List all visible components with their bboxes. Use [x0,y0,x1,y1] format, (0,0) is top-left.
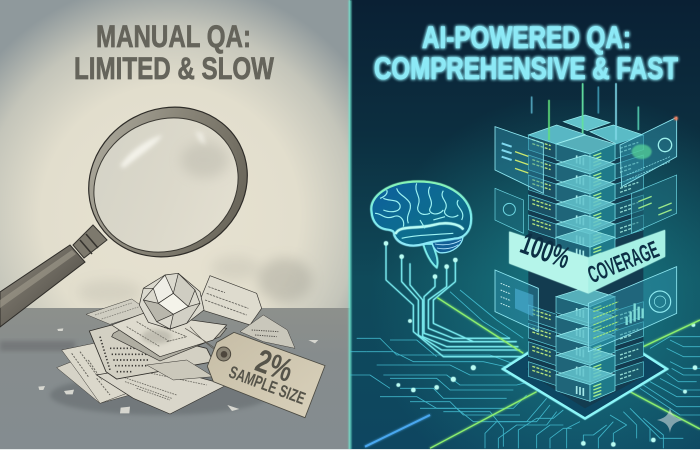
tag label: SAMPLE SIZE [226,362,308,408]
paper: right sheet [240,315,295,348]
paper: bottom front [97,365,227,414]
tag string [185,327,223,354]
brain stem [423,244,437,267]
title: manual QA: MANUAL QA: [96,18,251,54]
title: manual QA [74,18,274,86]
paper: left lower [57,340,140,403]
icon: magnifying glass [0,80,274,327]
tower top blocks [528,115,643,144]
paper: back right [197,276,262,325]
dark background [350,0,700,450]
lens highlight [120,135,162,168]
magnifier rim [62,80,274,284]
wall background [0,0,350,310]
paper pile [38,273,325,418]
magnifier handle [0,225,107,327]
banner text: 100%: 100% [516,226,575,275]
coverage banner [509,230,665,293]
brain folds [375,183,463,238]
cerebellum [431,235,463,253]
table surface [0,308,350,450]
icon: sparkle watermark [657,407,683,433]
bottom edge [0,449,700,450]
tower right column [615,135,643,386]
blue streak [365,415,430,447]
data panel: lower left [495,270,538,332]
circuit traces [350,241,700,448]
cerebrum outline [371,182,471,245]
paper: punched form [89,325,213,380]
tower body [528,135,643,408]
tower front column [556,135,615,401]
table shadow streak [0,341,75,351]
server tower [495,83,678,418]
title: manual QA: LIMITED & SLOW [74,50,274,86]
stain on wall [78,256,312,304]
tag value: 2% [251,341,298,389]
lower traces [350,290,700,448]
glowing base platform [503,317,667,418]
background glow [350,100,700,450]
tag eyelet [217,347,231,361]
paper scraps [38,328,318,413]
data panel: lower right [588,267,677,352]
data panel: mid right [632,175,677,233]
paper: top sheet [112,313,227,361]
magnifier lens [70,93,262,277]
trace nodes [384,241,697,446]
title: AI-powered QA [374,19,678,86]
glowing green lines [430,298,700,448]
table shadow under papers [50,375,270,415]
data panel: upper left [495,127,543,193]
lens smudge [181,142,229,178]
price tag [207,332,325,418]
vertical light beams [532,83,638,140]
panel: manual QA [0,0,350,450]
crumpled paper ball [139,273,204,329]
tower left column [528,135,557,386]
paper: back left [86,299,150,324]
title: AI-powered QA: AI-POWERED QA: [422,19,631,55]
panel: AI-powered QA [348,0,700,450]
brain traces [386,243,523,357]
panel divider [348,0,352,450]
icon: neon brain [371,182,471,267]
data panel: mid left [495,188,523,233]
temporal lobe [396,223,463,234]
data panel: upper right [620,116,678,187]
